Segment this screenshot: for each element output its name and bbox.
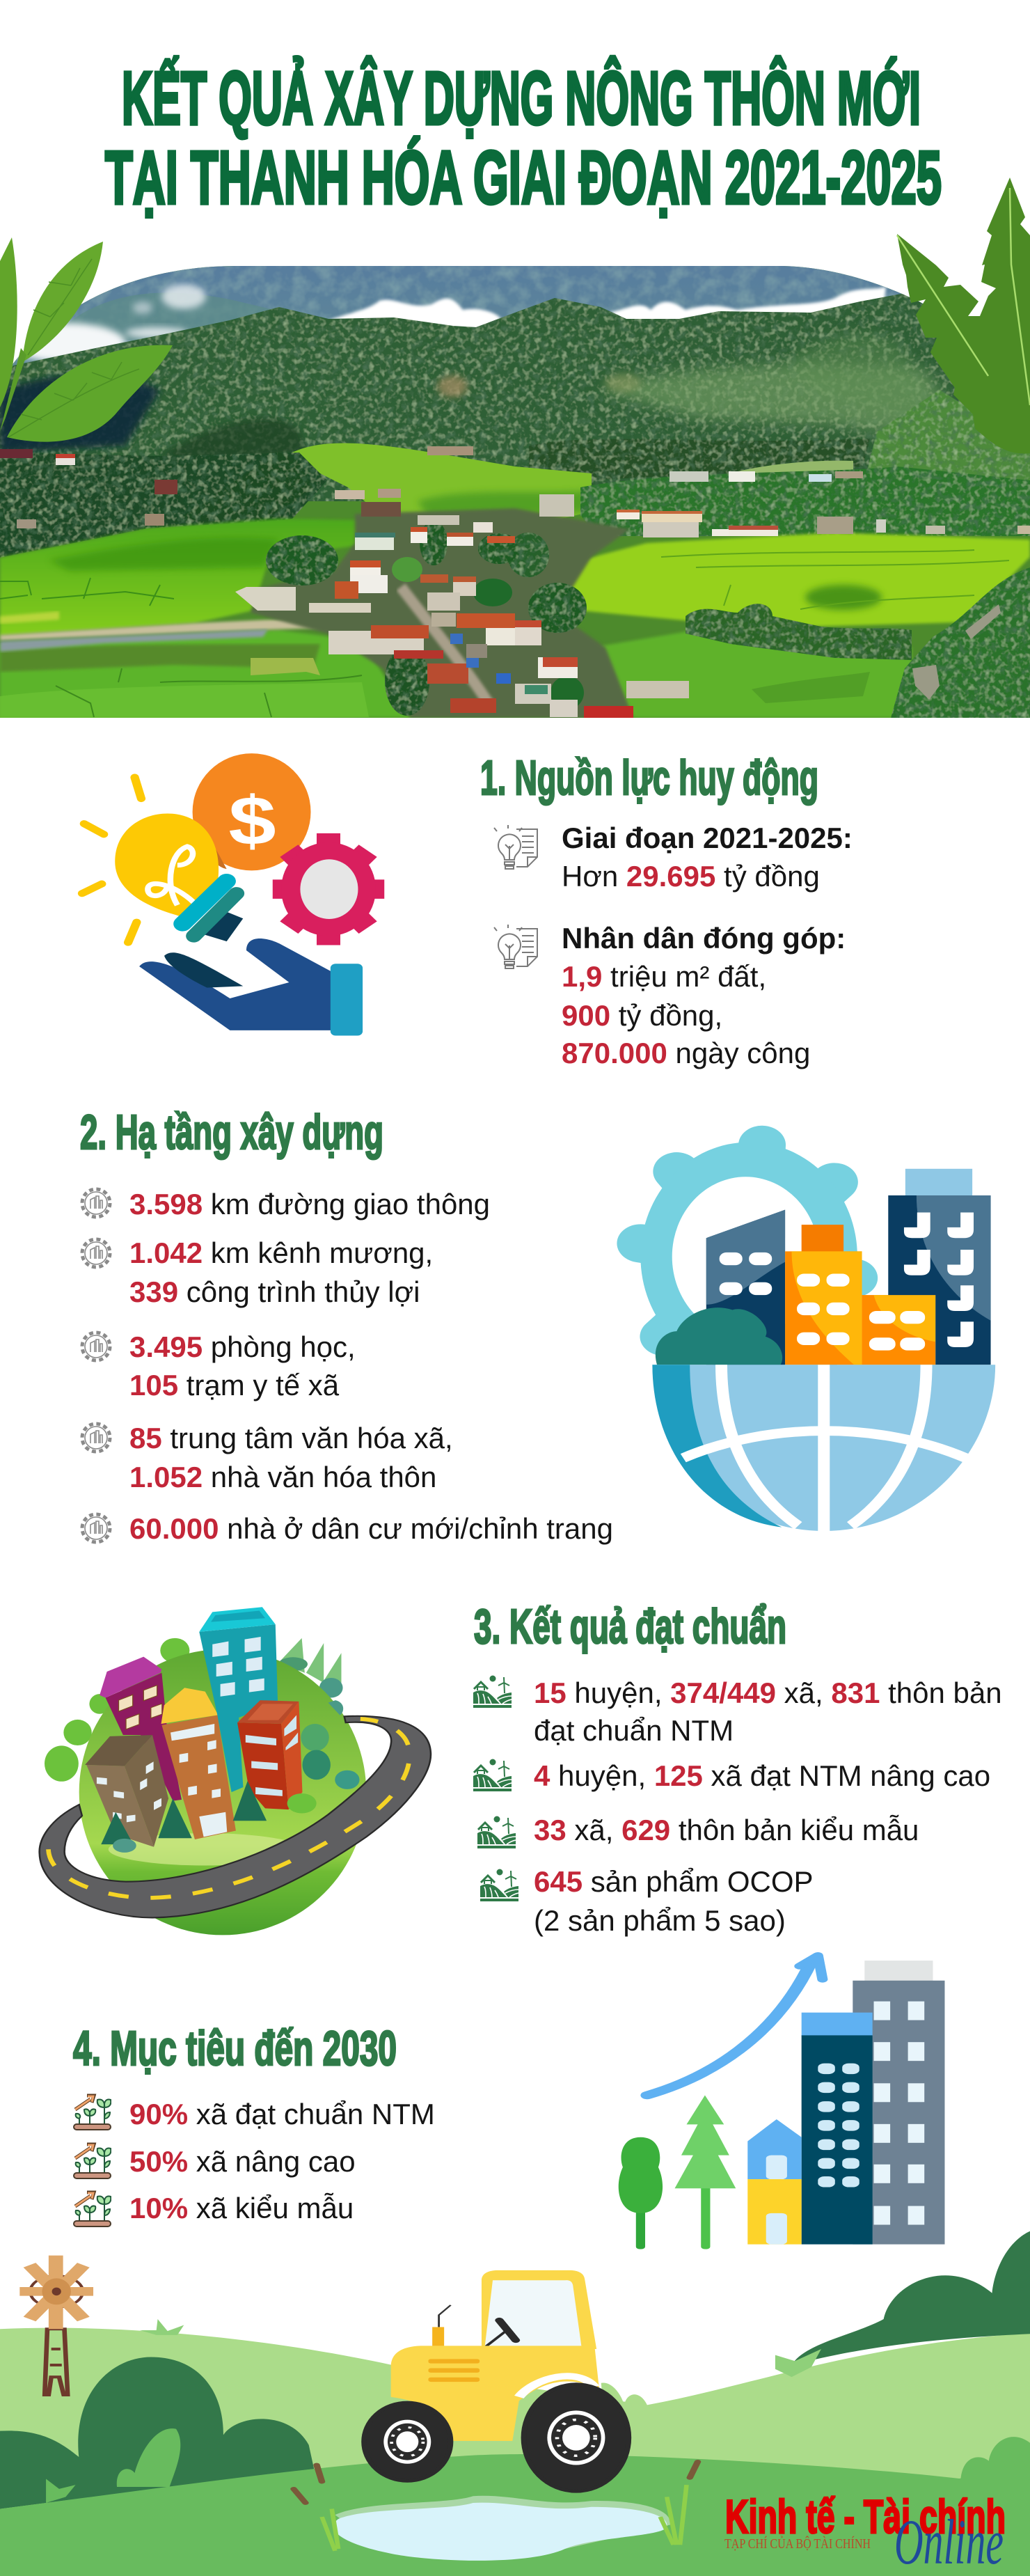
list item: 90 percent: 90% xã đạt chuẩn NTM <box>129 2098 435 2130</box>
list item: model communes: 33 xã, 629 thôn bản kiểu mẫu <box>534 1814 919 1846</box>
list item: districts and communes: đạt chuẩn NTM <box>534 1714 734 1747</box>
illustration: coin, bulb, gear and hand <box>82 753 384 1036</box>
list item: OCOP products: (2 sản phẩm 5 sao) <box>534 1904 786 1937</box>
list item: cultural centres: 85 trung tâm văn hóa xã, <box>129 1422 453 1454</box>
heading 2: 2. Hạ tầng xây dựng <box>80 1105 383 1159</box>
heading 1: 1. Nguồn lực huy động <box>480 751 818 805</box>
ground <box>0 2454 1030 2576</box>
rocky hillside bottom right <box>891 567 1030 718</box>
right rice field <box>548 533 1030 628</box>
list item: districts and communes <box>473 1675 1002 1747</box>
decorative leaves left <box>0 237 173 442</box>
section 1: resources <box>82 751 853 1069</box>
illustration: green planet with road ring <box>40 1607 431 1935</box>
list item: housing: 60.000 nhà ở dân cư mới/chỉnh trang <box>129 1512 613 1545</box>
heading 3: 3. Kết quả đạt chuẩn <box>474 1599 786 1654</box>
section 2: infrastructure <box>80 1105 995 1545</box>
logo: Kinh te - Tai chinh Online <box>724 2490 1006 2576</box>
item: total funding: Hơn 29.695 tỷ đồng <box>562 860 820 893</box>
list item: classrooms and clinics: 3.495 phòng học, <box>129 1330 356 1363</box>
item: people's contribution: 1,9 triệu m² đất, <box>562 960 766 993</box>
hill tufts <box>117 2428 1030 2487</box>
embankment and river <box>0 618 315 642</box>
tree line in right field <box>686 604 912 660</box>
section 4: targets to 2030 <box>73 1956 944 2249</box>
tractor <box>364 2270 628 2491</box>
list item: OCOP products <box>480 1865 814 1937</box>
lower left rice field <box>0 519 390 636</box>
forest mountain <box>0 292 1030 501</box>
hills: dark bushes right <box>792 2231 1030 2365</box>
item: total funding <box>494 822 853 893</box>
upper rice fields <box>292 443 592 518</box>
list item: 50 percent: 50% xã nâng cao <box>129 2145 356 2178</box>
logo: Kinh te - Tai chinh Online: TẠP CHÍ CỦA BỘ TÀI CHÍNH <box>724 2535 871 2552</box>
pond <box>294 2462 698 2561</box>
illustration: coin, bulb, gear and hand: $ <box>228 782 276 859</box>
village <box>251 508 633 718</box>
list item: cultural centres <box>82 1422 453 1493</box>
item: people's contribution <box>494 922 846 1069</box>
item: people's contribution: 900 tỷ đồng, <box>562 999 722 1032</box>
footer landscape <box>0 2231 1030 2576</box>
icon: bulb and note <box>494 825 537 869</box>
section 3: standards achieved <box>40 1599 1002 1937</box>
list item: roads: 3.598 km đường giao thông <box>129 1188 490 1220</box>
list item: classrooms and clinics: 105 trạm y tế xã <box>129 1369 340 1401</box>
left tree band <box>0 453 327 558</box>
right tree band <box>580 466 1030 536</box>
decorative leaves right <box>897 178 1030 453</box>
list item: canals and irrigation: 1.042 km kênh mương, <box>129 1236 433 1269</box>
bottom fields <box>0 630 411 718</box>
illustration: gear, city and globe <box>640 1142 995 1531</box>
list item: 10 percent: 10% xã kiểu mẫu <box>129 2192 354 2224</box>
title <box>105 56 942 219</box>
icon: bulb and note <box>494 925 537 968</box>
windmill <box>19 2256 93 2395</box>
item: people's contribution: Nhân dân đóng góp: <box>562 922 846 955</box>
item: people's contribution: 870.000 ngày công <box>562 1037 810 1069</box>
item: total funding: Giai đoạn 2021-2025: <box>562 822 853 854</box>
list item: canals and irrigation <box>82 1236 433 1308</box>
hills: dark bushes left <box>0 2357 314 2509</box>
hero photo: green valley village <box>0 265 1030 724</box>
list item: cultural centres: 1.052 nhà văn hóa thôn <box>129 1461 436 1493</box>
list item: classrooms and clinics <box>82 1330 356 1401</box>
list item: canals and irrigation: 339 công trình thủy lợi <box>129 1275 420 1308</box>
list item: advanced standard: 4 huyện, 125 xã đạt NTM nâng cao <box>534 1759 990 1792</box>
list item: OCOP products: 645 sản phẩm OCOP <box>534 1865 814 1898</box>
heading 4: 4. Mục tiêu đến 2030 <box>73 2021 397 2075</box>
illustration: growth arrow, trees and buildings <box>619 1956 944 2249</box>
list item: districts and communes: 15 huyện, 374/449 xã, 831 thôn bản <box>534 1676 1002 1709</box>
